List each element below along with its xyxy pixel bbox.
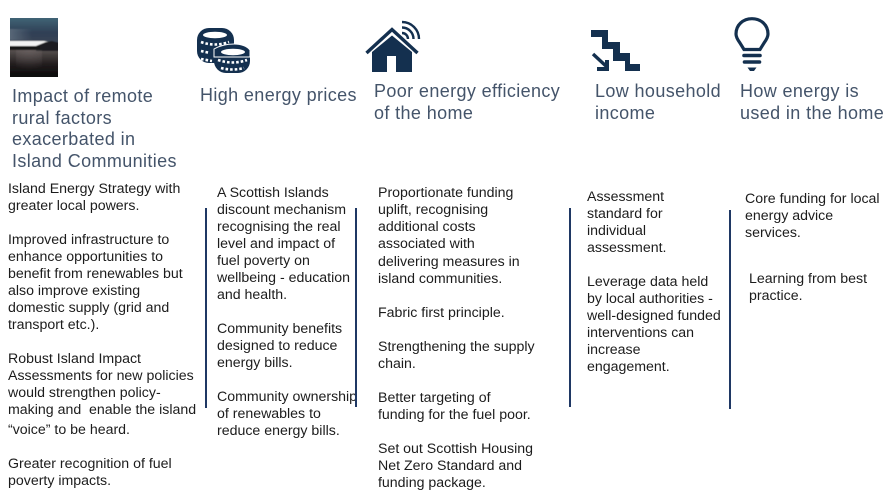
text block: income measures: interventions can — [587, 325, 694, 341]
text block: island measures: Assessments for new policies — [8, 368, 194, 384]
text block: island measures: Improved infrastructure to — [8, 232, 169, 248]
text block: island measures: transport etc.). — [8, 317, 99, 333]
text block: efficiency measures: chain. — [378, 356, 416, 372]
heading: remote rural factors: Island Communities — [12, 151, 177, 171]
icon: island landscape photo — [10, 18, 58, 77]
text block: energy use measures — [745, 191, 880, 241]
icon: light bulb — [734, 17, 770, 71]
heading: how energy is used: used in the home — [740, 103, 884, 123]
text block: efficiency measures: funding package. — [378, 475, 486, 491]
text block: island measures: enhance opportunities to — [8, 249, 163, 265]
text block: income measures: well-designed funded — [587, 308, 721, 324]
text block: price measures: wellbeing - education — [217, 270, 350, 286]
heading: low household income: Low household — [595, 81, 721, 101]
text block: island measures: making and enable the island — [8, 402, 196, 418]
text block: income measures: assessment. — [587, 240, 666, 256]
text block: price measures: discount mechanism — [217, 202, 346, 218]
text block: efficiency measures: Fabric first principle. — [378, 305, 505, 321]
text block: income measures: standard for — [587, 206, 663, 222]
text block: price measures: of renewables to — [217, 406, 321, 422]
text block: island measures: greater local powers. — [8, 198, 139, 214]
text block: island measures: benefit from renewables but — [8, 266, 183, 282]
heading: poor energy efficiency: of the home — [374, 103, 473, 123]
text block: efficiency measures: Proportionate funding — [378, 185, 513, 201]
heading: how energy is used: How energy is — [740, 81, 859, 101]
text block: price measures: energy bills. — [217, 355, 293, 371]
text block: price measures: A Scottish Islands — [217, 185, 329, 201]
text block: income measures: increase — [587, 342, 641, 358]
text block: island measures: domestic supply (grid and — [8, 300, 169, 316]
text block: energy use measures: services. — [745, 225, 801, 241]
text block: price measures: level and impact of — [217, 236, 335, 252]
text block: island measures: poverty impacts. — [8, 473, 111, 489]
text block: efficiency measures: uplift, recognising — [378, 202, 488, 218]
text block: price measures: Community ownership — [217, 389, 357, 405]
text block: income measures — [587, 189, 721, 375]
heading: remote rural factors: Impact of remote — [12, 86, 153, 106]
text block: island measures: Greater recognition of fuel — [8, 456, 172, 472]
text block: income measures: individual — [587, 223, 646, 239]
icon: coins — [197, 28, 250, 73]
text block: price measures: recognising the real — [217, 219, 341, 235]
heading: poor energy efficiency: Poor energy efficiency — [374, 81, 560, 101]
text block: income measures: by local authorities - — [587, 291, 713, 307]
heading: low household income: income — [595, 103, 655, 123]
text block: efficiency measures: Better targeting of — [378, 390, 491, 406]
text block: price measures: reduce energy bills. — [217, 423, 340, 439]
text block: best practice — [749, 271, 867, 304]
text block: efficiency measures: Strengthening the supply — [378, 339, 535, 355]
text block: island measures: Robust Island Impact — [8, 351, 141, 367]
text block: efficiency measures: associated with — [378, 236, 475, 252]
text block: efficiency measures — [378, 185, 535, 491]
text block: income measures: engagement. — [587, 359, 670, 375]
text block: price measures: Community benefits — [217, 321, 342, 337]
icon: descending stairs with arrow — [591, 30, 640, 71]
text block: price measures: fuel poverty on — [217, 253, 310, 269]
text block: island measures: Island Energy Strategy with — [8, 181, 180, 197]
heading: high energy prices: High energy prices — [200, 85, 357, 105]
text block: price measures: and health. — [217, 287, 287, 303]
text block: efficiency measures: Net Zero Standard and — [378, 458, 522, 474]
heading: remote rural factors — [12, 86, 177, 171]
text block: income measures: Leverage data held — [587, 274, 708, 290]
text block: efficiency measures: additional costs — [378, 219, 476, 235]
text block: energy use measures: energy advice — [745, 208, 833, 224]
heading: low household income — [595, 81, 721, 123]
text block: energy use measures: Core funding for local — [745, 191, 880, 207]
heading: remote rural factors: rural factors — [12, 108, 112, 128]
text block: island measures: also improve existing — [8, 283, 140, 299]
heading: remote rural factors: exacerbated in — [12, 129, 135, 149]
text block: price measures — [217, 185, 357, 439]
text block: island measures: would strengthen policy- — [8, 385, 161, 401]
text block: efficiency measures: island communities. — [378, 271, 502, 287]
heading: poor energy efficiency — [374, 81, 560, 123]
icon: house with wifi signal — [365, 20, 420, 72]
text block: efficiency measures: funding for the fuel poor. — [378, 407, 531, 423]
text block: island measures: “voice” to be heard. — [8, 422, 130, 438]
text block: island measures — [8, 181, 196, 489]
text block: income measures: Assessment — [587, 189, 664, 205]
text block: efficiency measures: delivering measures in — [378, 254, 520, 270]
text block: efficiency measures: Set out Scottish Housing — [378, 441, 533, 457]
text block: best practice: Learning from best — [749, 271, 867, 287]
text block: best practice: practice. — [749, 288, 803, 304]
text block: price measures: designed to reduce — [217, 338, 337, 354]
heading: how energy is used — [740, 81, 884, 123]
